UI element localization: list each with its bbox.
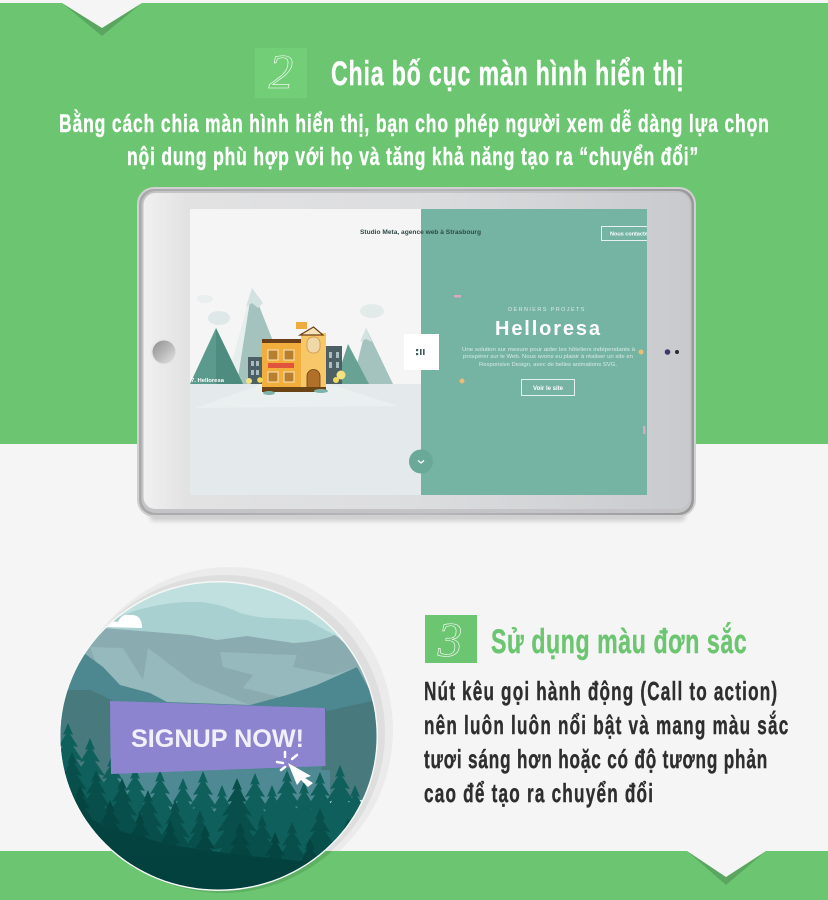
forest floor (84, 816, 308, 890)
section 3 heading: Sử dụng màu đơn sắc (491, 621, 747, 661)
section 3 description: tươi sáng hơn hoặc có độ tương phản (424, 744, 767, 774)
screen paragraph: prospérer sur le Web. Nous avons eu plaisir à réaliser un site en (463, 354, 633, 360)
screen paragraph: Une solution sur mesure pour aider les hôteliers indépendants à (462, 347, 636, 353)
landscape (60, 582, 376, 890)
screen heading: Helloresa (495, 318, 601, 340)
bottom notch arrow (687, 851, 766, 885)
section 2 heading: Chia bố cục màn hình hiển thị (331, 56, 683, 93)
circle backdrop (100, 567, 393, 893)
site button (522, 380, 574, 396)
left half background (190, 209, 421, 384)
screen paragraph: Responsive Design, avec de belles animations SVG. (479, 362, 618, 368)
green top band (0, 3, 828, 444)
contact button (601, 226, 647, 241)
section 2 number badge: 2 (269, 44, 293, 99)
section 3 description (424, 676, 788, 808)
section 2 description: Bằng cách chia màn hình hiển thị, bạn cho phép người xem dễ dàng lựa chọn (59, 109, 769, 138)
section 2 description: nội dung phù hợp với họ và tăng khả năng tạo ra “chuyển đổi” (127, 142, 698, 171)
contact button: Nous contacter (610, 232, 651, 238)
left caption: 7. Helloresa (191, 378, 225, 384)
green bottom band (0, 851, 828, 900)
right half teal panel (421, 209, 647, 495)
section 3 description: nên luôn luôn nổi bật và mang màu sắc (424, 710, 788, 740)
section 2 description (59, 109, 769, 171)
screen paragraph (462, 347, 636, 368)
mountains and clouds (190, 288, 393, 384)
section 3 round illustration (60, 567, 393, 893)
header tagline: Studio Meta, agence web à Strasbourg (360, 230, 481, 236)
cursor icon (277, 752, 313, 787)
sign-up button: SIGNUP NOW! (131, 725, 304, 753)
white menu tab (404, 334, 439, 370)
camera dots (665, 349, 679, 355)
snowy ground (190, 384, 421, 495)
section 3 description: cao để tạo ra chuyển đổi (424, 778, 653, 808)
home button (151, 339, 177, 365)
scroll down button (409, 450, 433, 474)
sign-up button (110, 701, 326, 774)
overline: DERNIERS PROJETS (508, 307, 586, 313)
site button: Voir le site (533, 386, 564, 392)
tablet screen (190, 209, 662, 495)
cloud (104, 615, 142, 628)
section 3 description: Nút kêu gọi hành động (Call to action) (424, 676, 777, 706)
circle border (59, 581, 378, 891)
section 2 number badge (255, 44, 307, 99)
tablet body (137, 187, 696, 517)
section 3 number badge (425, 612, 477, 667)
mid-tone trees (60, 723, 361, 888)
decorative confetti (454, 295, 646, 434)
tablet shadow (150, 512, 685, 521)
dark trees (64, 752, 350, 889)
building illustration (246, 322, 346, 395)
darkest trees (75, 786, 316, 882)
tablet mockup (137, 187, 696, 521)
top notch arrow (62, 3, 142, 36)
section 3 number badge: 3 (437, 612, 462, 667)
